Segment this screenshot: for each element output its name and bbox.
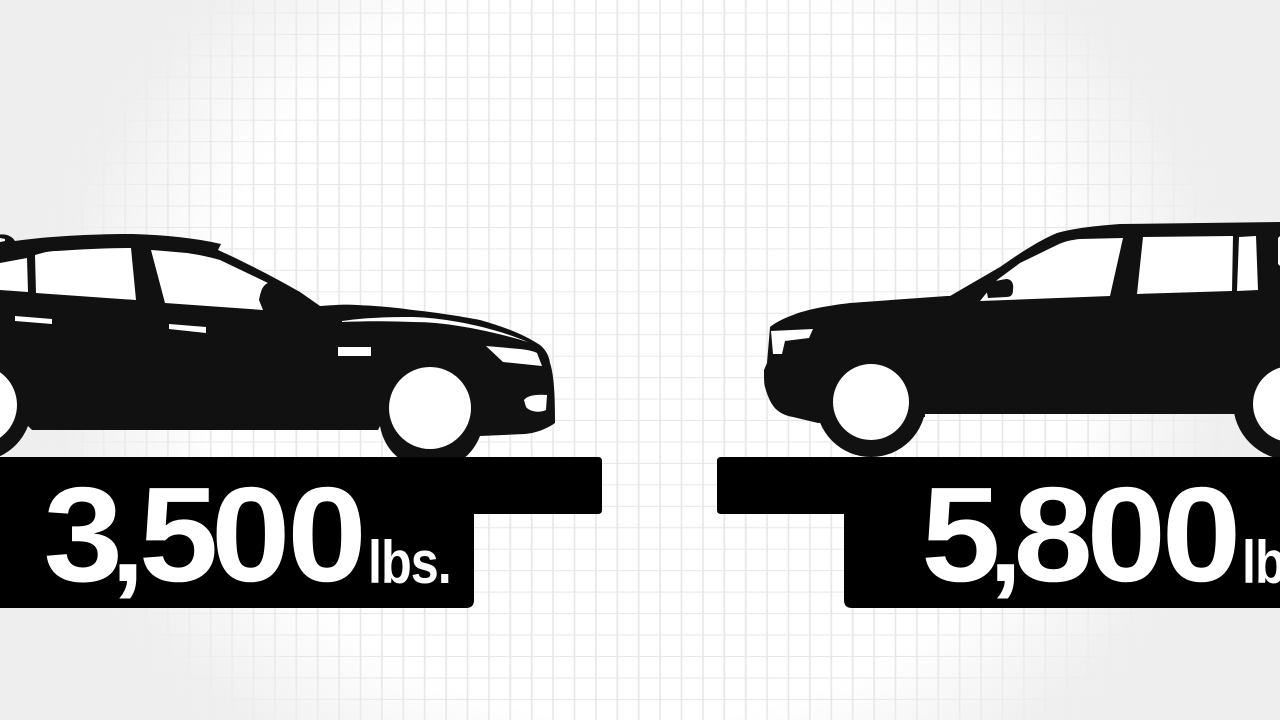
side mirror: [985, 279, 1013, 298]
fog lamp: [524, 395, 547, 412]
left weight unit: lbs.: [368, 529, 451, 596]
rear wheel: [0, 365, 17, 445]
headlight: [486, 346, 542, 366]
front tyre: [379, 357, 481, 459]
left scale platform: [0, 457, 602, 610]
left weight value: 0: [211, 460, 291, 610]
right weight value: 0: [1162, 460, 1241, 610]
left weight value: 3: [43, 460, 123, 610]
rear spoiler gap: [0, 238, 5, 242]
left car: sedan silhouette: [0, 234, 555, 470]
right weight value: 0: [1086, 460, 1166, 610]
front wheel: [833, 364, 909, 440]
left weight value: 0: [287, 460, 367, 610]
headlight: [771, 329, 813, 354]
front tyre: [816, 347, 926, 457]
left weight value: ,: [111, 481, 144, 605]
front wheel: [389, 367, 471, 449]
rear tyre: [1233, 344, 1280, 460]
left weight value: 5: [139, 460, 218, 610]
rear wheel: [1253, 366, 1280, 442]
rear window: [1237, 236, 1258, 291]
side marker: [338, 347, 371, 356]
hood highlight: [342, 317, 528, 342]
right scale platform: [717, 457, 1280, 610]
middle window: [1137, 236, 1233, 294]
right weight value: 8: [1013, 460, 1093, 610]
right car: SUV silhouette: [764, 222, 1280, 460]
rear door window: [35, 248, 136, 300]
rear tyre: [0, 350, 32, 460]
right weight value: 5: [921, 460, 1001, 610]
front door window: [151, 250, 268, 310]
rear quarter window: [0, 258, 28, 292]
windshield and front window: [980, 238, 1123, 301]
far rear window: [1278, 236, 1280, 266]
right weight value: ,: [989, 481, 1022, 605]
rear door handle: [15, 316, 52, 324]
front door handle: [169, 324, 206, 333]
